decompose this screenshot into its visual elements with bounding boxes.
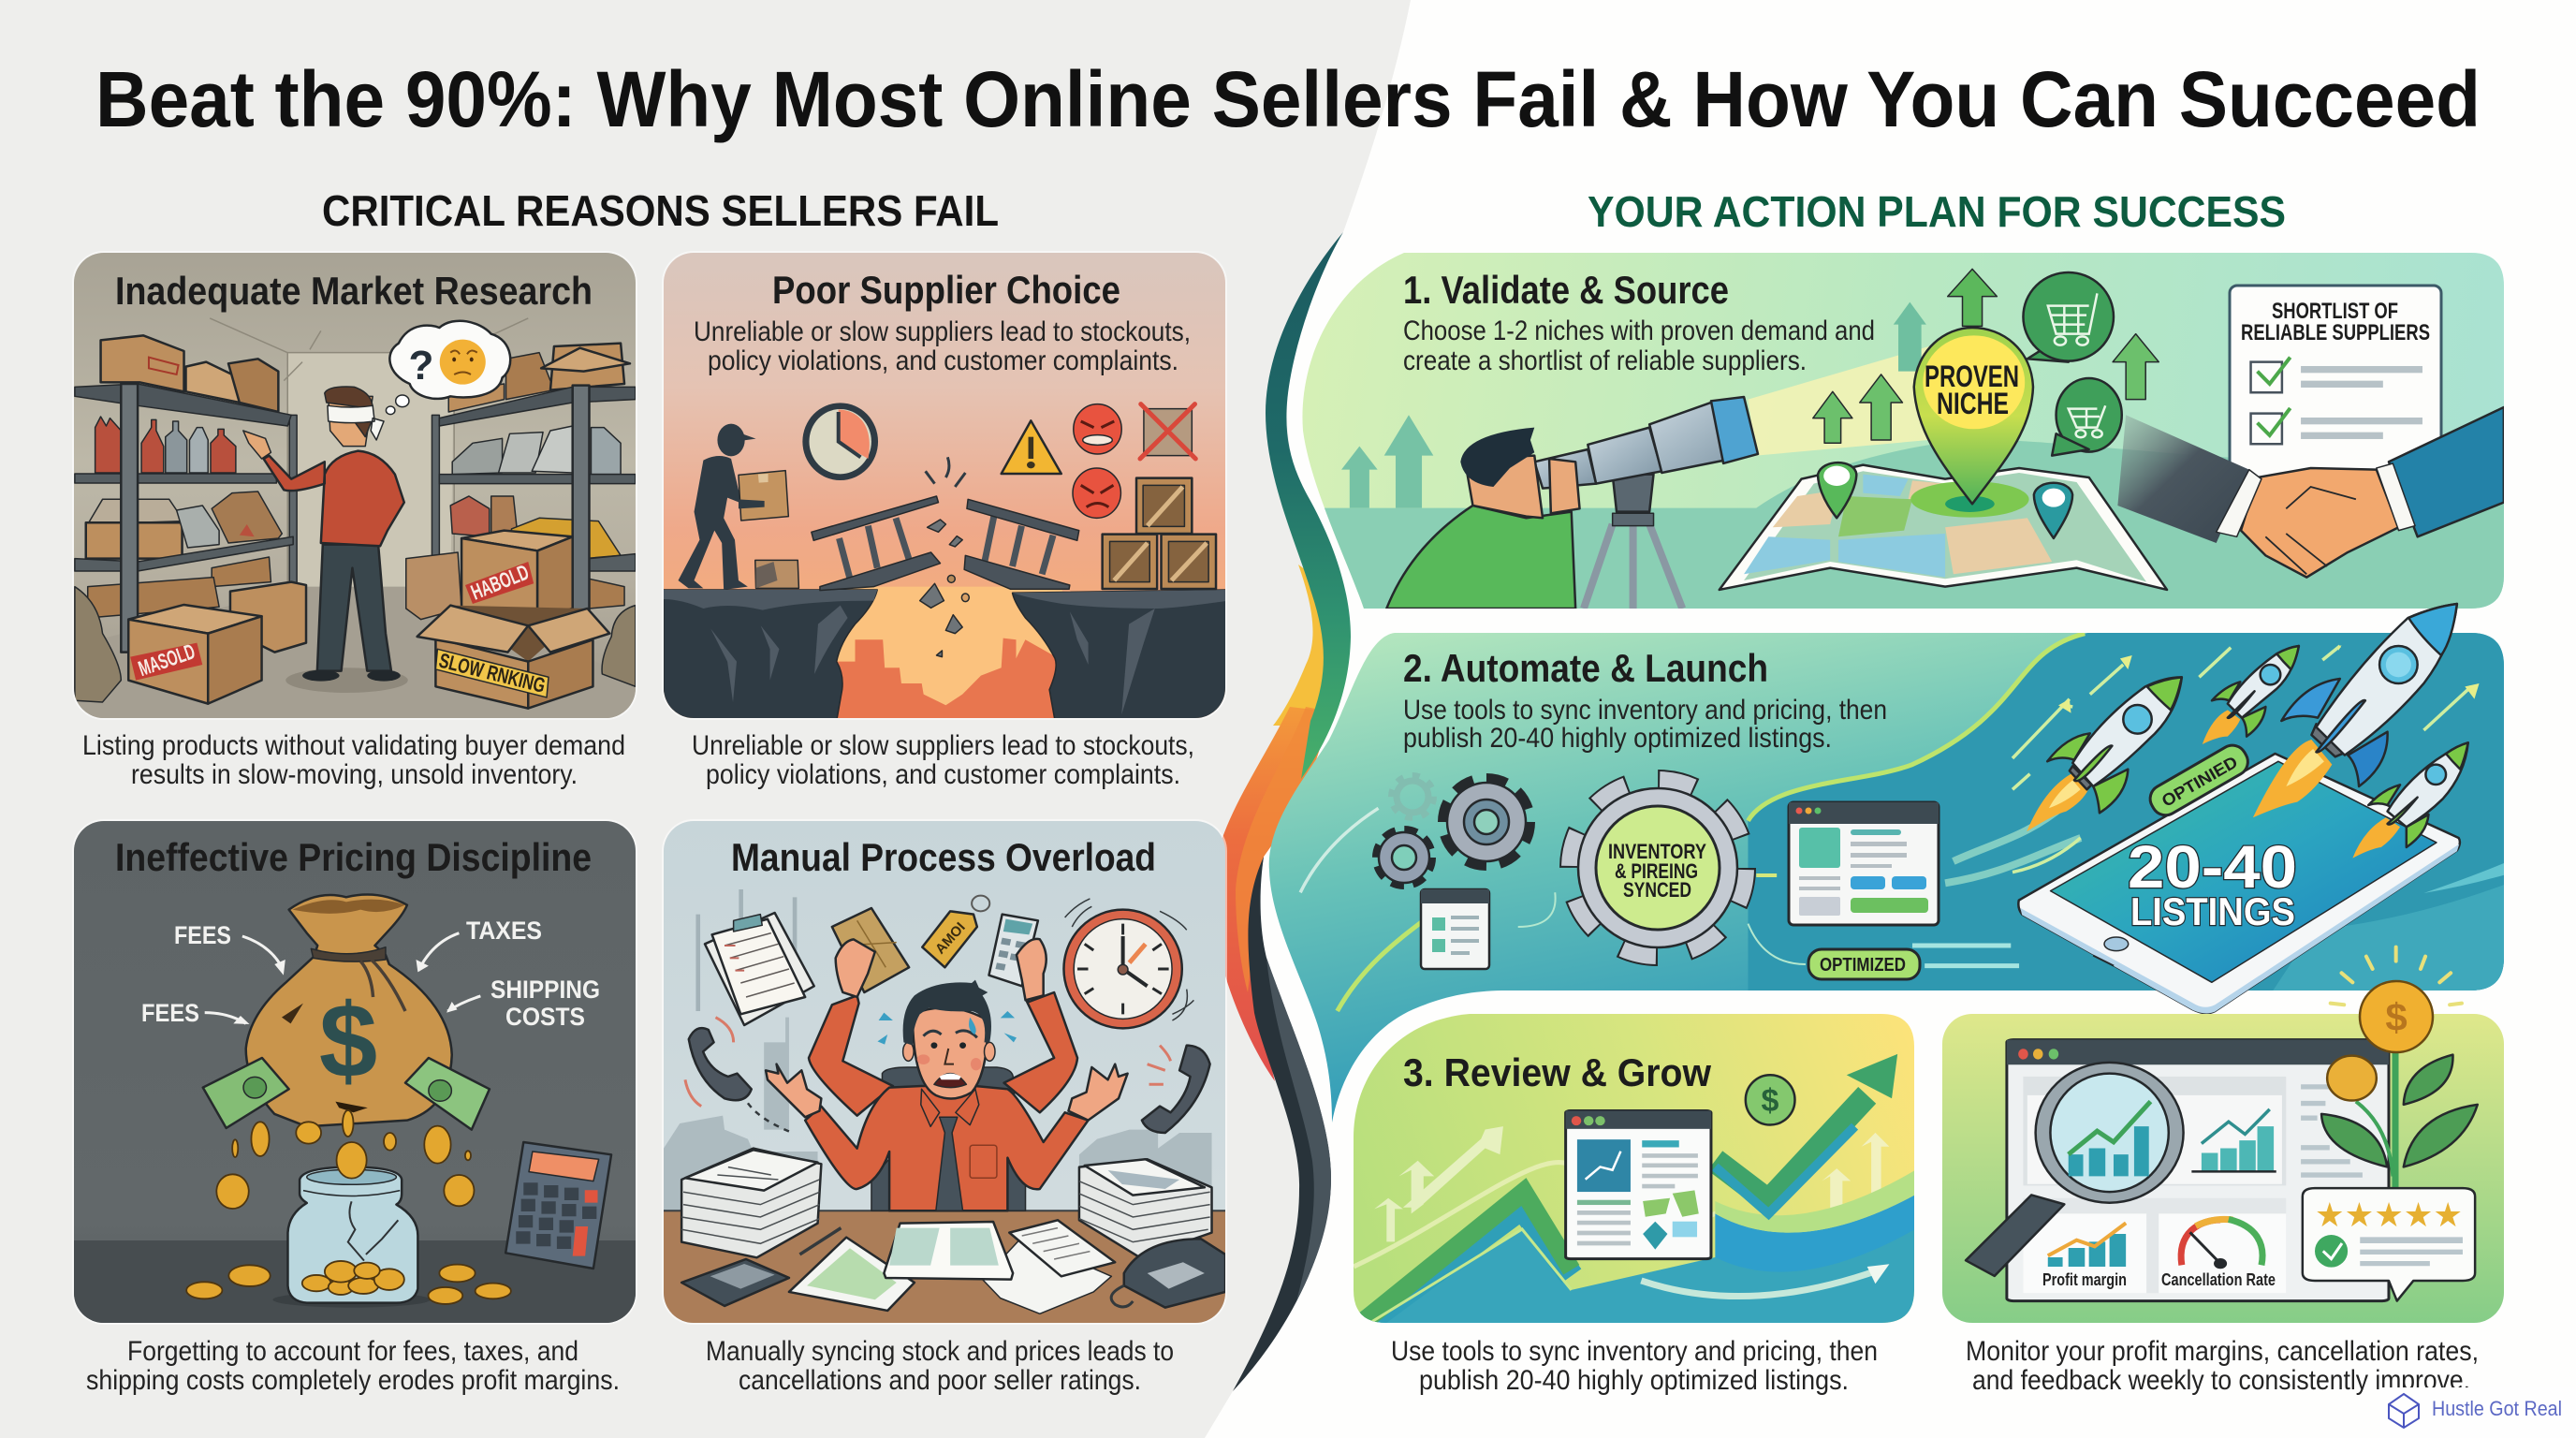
- money sack: [246, 895, 452, 1126]
- rocket: left: [2027, 677, 2182, 831]
- lower-right wave: [2012, 645, 2509, 1002]
- parcel: [832, 908, 909, 992]
- plant: [2393, 1049, 2399, 1189]
- panel: monitor dashboard: [1942, 947, 2504, 1323]
- panel: step 3 review and grow: [1348, 1011, 1921, 1329]
- caption: market research: Listing products without validating buyer demand: [82, 730, 625, 761]
- card description: policy violations, and customer complaints.: [708, 345, 1178, 376]
- review bubble: [2303, 1188, 2475, 1301]
- mini chart: [2202, 1126, 2274, 1171]
- listing window: [1789, 802, 1939, 925]
- desk papers: [983, 1238, 1111, 1313]
- label: fees 2: FEES: [141, 999, 199, 1027]
- step 1 illustration: [1288, 248, 2576, 624]
- tablet with 20-40 listings: [2018, 754, 2460, 1013]
- ribbon: teal-green band: [1266, 232, 1351, 779]
- right shelving: [432, 415, 439, 571]
- panel: step 1 validate and source: [1288, 248, 2576, 624]
- floating calculator: [988, 915, 1038, 986]
- caption: step 4: and feedback weekly to consistently improve.: [1972, 1365, 2470, 1396]
- caption: step 3: Use tools to sync inventory and pricing, then: [1391, 1336, 1878, 1367]
- panel: ineffective pricing discipline: [72, 819, 637, 1325]
- step 3 heading: 3. Review & Grow: [1403, 1050, 1711, 1094]
- card title: Ineffective Pricing Discipline: [115, 835, 592, 879]
- watermark text: Hustle Got Real: [2432, 1397, 2562, 1420]
- gear: synced: & PIREING: [1615, 859, 1698, 883]
- wall clock: [1063, 910, 1182, 1028]
- optinied pill: OPTINIED: [2159, 753, 2241, 811]
- man: blindfolded: [285, 668, 408, 693]
- supplier shortlist document: RELIABLE SUPPLIERS: [2241, 320, 2430, 345]
- profit chart: [2048, 1234, 2126, 1267]
- caption: market research: [82, 730, 625, 790]
- panel: inadequate market research: [72, 251, 637, 721]
- man head: [913, 1007, 988, 1098]
- ribbon: yellow band: [1273, 565, 1330, 726]
- clock: [802, 403, 878, 480]
- big pin: [1914, 328, 2033, 504]
- crates: [1136, 478, 1192, 534]
- sack dollar sign: $: [319, 982, 377, 1099]
- broken bridge: [840, 517, 1053, 578]
- card description: [694, 316, 1191, 376]
- paper stacks: [681, 1149, 821, 1257]
- tablet with 20-40 listings: 20-40: [2128, 833, 2297, 901]
- left shelving: [289, 415, 297, 583]
- crossed box: [1144, 409, 1192, 456]
- optinied pill: [2145, 741, 2253, 820]
- caption: pricing discipline: shipping costs completely erodes profit margins.: [86, 1365, 620, 1396]
- cancellation gauge: [2181, 1220, 2220, 1265]
- gold coin on plant: [2331, 947, 2462, 1052]
- supplier shortlist document: [2230, 286, 2441, 520]
- supplier shortlist document: SHORTLIST OF: [2272, 299, 2398, 324]
- magnifier: [1966, 1195, 2064, 1276]
- caption: pricing discipline: Forgetting to account for fees, taxes, and: [127, 1336, 578, 1367]
- coins on table: [228, 1265, 271, 1286]
- card title: Poor Supplier Choice: [772, 268, 1120, 312]
- gold coin on plant: $: [2385, 995, 2408, 1039]
- card description: Unreliable or slow suppliers lead to stockouts,: [694, 316, 1191, 347]
- gear: outline small: [1391, 775, 1434, 818]
- label: shipping costs: SHIPPING: [490, 976, 600, 1004]
- optimized pill: OPTIMIZED: [1820, 955, 1906, 976]
- caption: pricing discipline: [86, 1336, 620, 1396]
- telescope: [1584, 524, 1682, 609]
- man torso: [805, 1086, 1088, 1211]
- annotation arrows: [205, 933, 480, 1023]
- clipboard: [705, 913, 814, 1025]
- desk calculator: [681, 1259, 789, 1306]
- angry faces: [1074, 404, 1121, 454]
- caption: supplier choice: Unreliable or slow suppliers lead to stockouts,: [692, 730, 1194, 761]
- panel: poor supplier choice: [662, 251, 1229, 721]
- rockets: [2027, 604, 2468, 858]
- caption: step 3: publish 20-40 highly optimized listings.: [1419, 1365, 1849, 1396]
- rocket: right: [2352, 742, 2468, 858]
- panel A illustration: [74, 253, 636, 721]
- panel C illustration: [74, 821, 636, 1325]
- step 3 illustration: [1348, 1011, 1921, 1329]
- cracked jar: [273, 1296, 430, 1307]
- caption: step 4: [1966, 1336, 2479, 1396]
- card title: Manual Process Overload: [731, 835, 1156, 879]
- falling debris: [920, 520, 962, 657]
- step 2 illustration: [1264, 627, 2520, 1128]
- raised arms: [809, 995, 893, 1116]
- front hands: [766, 1064, 821, 1117]
- warning sign: [1002, 420, 1061, 474]
- step 2 description: [1403, 695, 1887, 754]
- caption: supplier choice: [692, 730, 1194, 790]
- calculator: [505, 1142, 611, 1269]
- dollar coin: [1746, 1075, 1794, 1124]
- map: [1720, 465, 2167, 590]
- gear: lower: [1378, 831, 1430, 884]
- ringing phones: [689, 1028, 752, 1100]
- ribbon: orange-red band: [1210, 707, 1329, 1081]
- dashboard illustration: [1942, 1014, 2504, 1323]
- five stars: ★★★★★: [2315, 1196, 2463, 1235]
- front box: [128, 605, 262, 634]
- left grey background: [0, 0, 1411, 1438]
- step 2 description: publish 20-40 highly optimized listings.: [1403, 723, 1832, 754]
- man at telescope: [1386, 506, 1575, 609]
- browser window: [2007, 1040, 2389, 1301]
- small app window: [1421, 889, 1489, 969]
- heading: critical reasons: CRITICAL REASONS SELLERS FAIL: [322, 186, 999, 235]
- caption: step 4: Monitor your profit margins, cancellation rates,: [1966, 1336, 2479, 1367]
- panel B illustration: [664, 253, 1229, 721]
- price tag text: AMOI: [932, 919, 969, 958]
- icon: cube: [2389, 1394, 2419, 1428]
- ribbon: dark band highlight: [1266, 958, 1331, 1301]
- label: cancellation rate: Cancellation Rate: [2161, 1270, 2276, 1289]
- cash notes: [203, 1058, 289, 1128]
- thought cloud: [389, 321, 510, 399]
- pin text: NICHE: [1937, 387, 2009, 420]
- panel D illustration: [664, 821, 1225, 1325]
- question mark: ?: [409, 343, 433, 389]
- panel: step 2 automate and launch: [1264, 604, 2520, 1128]
- coin dollar sign: $: [1762, 1083, 1779, 1119]
- caption: supplier choice: policy violations, and customer complaints.: [706, 759, 1180, 790]
- card title: Inadequate Market Research: [115, 269, 593, 313]
- ribbon: dark band: [1233, 857, 1331, 1391]
- box label: slow ranking: SLOW RNKING: [437, 649, 548, 697]
- ribbon: orange inner band: [1236, 707, 1329, 992]
- pin text: [1925, 360, 2019, 420]
- report window: [1566, 1111, 1711, 1259]
- falling coins: [251, 1122, 270, 1156]
- price tag: [922, 911, 977, 967]
- gear: synced: INVENTORY: [1608, 840, 1706, 863]
- caption: market research: results in slow-moving, unsold inventory.: [131, 759, 578, 790]
- tablet with 20-40 listings: LISTINGS: [2130, 889, 2295, 933]
- optimized pill: [1808, 949, 1920, 979]
- desk phone: [1124, 1239, 1225, 1308]
- label: shipping costs: COSTS: [505, 1003, 585, 1031]
- heading: action plan: YOUR ACTION PLAN FOR SUCCESS: [1588, 187, 2286, 236]
- worker silhouette: [678, 456, 748, 590]
- step 1 description: create a shortlist of reliable suppliers.: [1403, 345, 1807, 376]
- growth arrows: [1894, 302, 1926, 372]
- step 1 description: [1403, 315, 1875, 376]
- box label: habold: HABOLD: [467, 560, 532, 605]
- box label: masold: MASOLD: [135, 638, 198, 681]
- caption: step 3: [1391, 1336, 1878, 1396]
- stacked boxes: [461, 531, 573, 550]
- gear: upper: [1445, 781, 1528, 863]
- colored ribbon divider: [1210, 232, 1351, 1391]
- gear: synced: SYNCED: [1623, 878, 1691, 902]
- rocket: large: [2253, 604, 2457, 817]
- gear: synced: [1572, 782, 1744, 954]
- hands and sleeves: [2117, 407, 2504, 578]
- gears: [1378, 775, 1744, 954]
- step 1 heading: 1. Validate & Source: [1403, 268, 1729, 312]
- label: taxes: TAXES: [466, 917, 542, 945]
- label: profit margin: Profit margin: [2042, 1270, 2127, 1289]
- panel: manual process overload: [662, 819, 1227, 1325]
- pin text: PROVEN: [1925, 360, 2019, 393]
- watermark: [2380, 1387, 2576, 1438]
- step 1 description: Choose 1-2 niches with proven demand and: [1403, 315, 1875, 346]
- label: shipping costs: [490, 976, 600, 1031]
- rocket: small: [2203, 646, 2299, 744]
- step 2 description: Use tools to sync inventory and pricing, then: [1403, 695, 1887, 726]
- caption: manual process: Manually syncing stock and prices leads to: [706, 1336, 1174, 1367]
- label: fees: FEES: [174, 921, 231, 949]
- step 2 heading: 2. Automate & Launch: [1403, 646, 1768, 690]
- cart bubbles: [2027, 344, 2069, 362]
- caption: manual process: [706, 1336, 1174, 1396]
- office chair: [871, 1067, 1026, 1211]
- caption: manual process: cancellations and poor seller ratings.: [739, 1365, 1141, 1396]
- desk: [664, 1211, 1225, 1325]
